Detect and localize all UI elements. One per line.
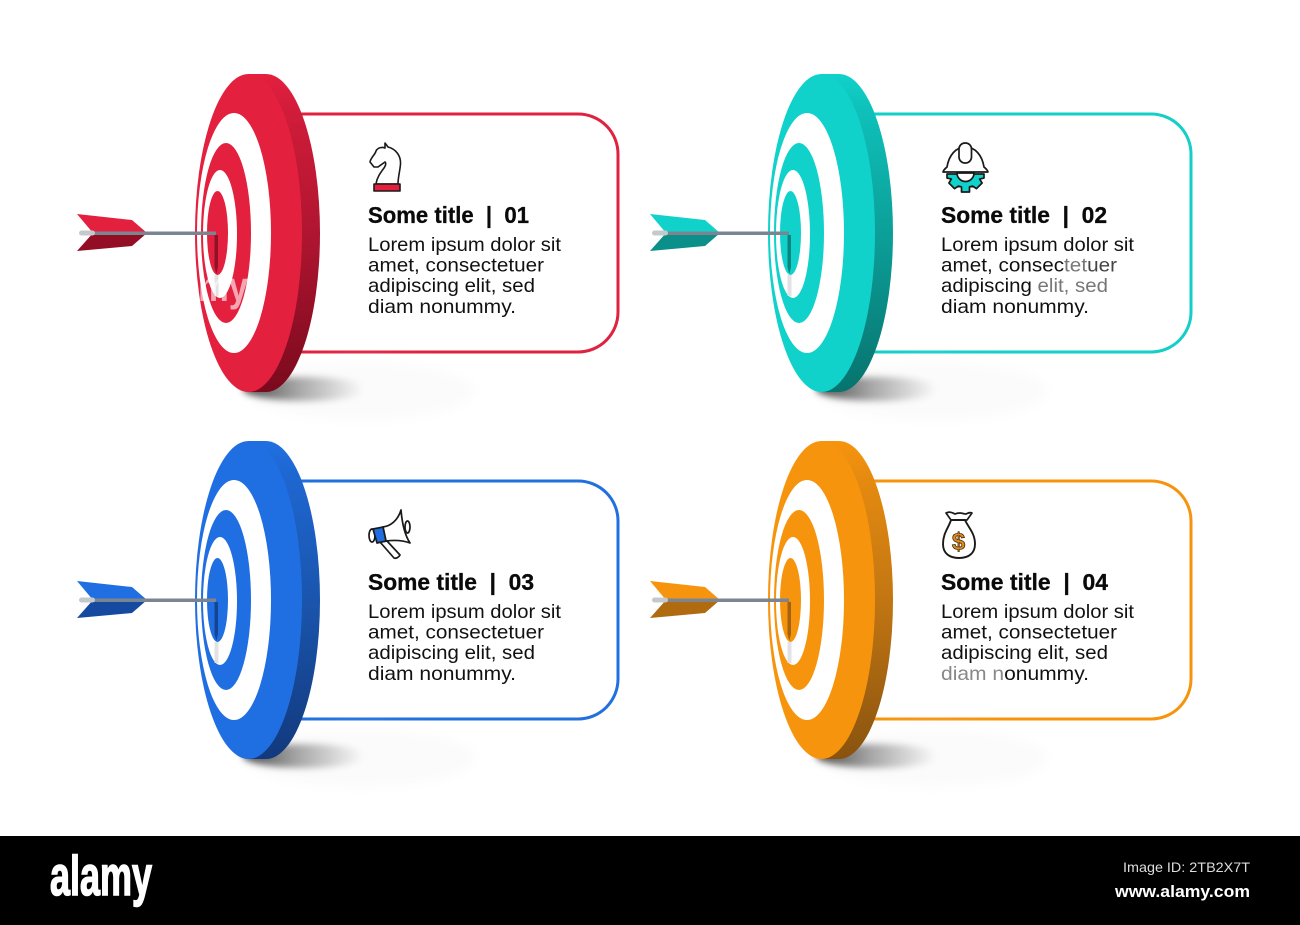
body text 03 — [368, 601, 562, 685]
panel: step 03 blue target — [77, 441, 618, 787]
body text 01 — [368, 234, 562, 318]
arrow 01 — [77, 214, 216, 251]
floor shadow 01 — [243, 362, 475, 420]
outlined card 04 — [835, 481, 1191, 719]
panel: step 02 teal target — [650, 74, 1191, 420]
website: www.alamy.com — [1114, 882, 1250, 901]
body text 03: amet, consectetuer — [368, 622, 545, 644]
arrow 02 — [650, 214, 789, 251]
body text 04: Lorem ipsum dolor sit — [941, 601, 1135, 623]
arrow 03 — [77, 581, 216, 618]
outlined card 03 — [262, 481, 618, 719]
title 02: Some title | 02 — [941, 202, 1107, 228]
panel: step 01 red target — [77, 74, 618, 420]
body text 02 — [941, 234, 1135, 318]
body text 04: diam nonummy. — [941, 663, 1089, 685]
body text 03: adipiscing elit, sed — [368, 642, 535, 664]
footer bar — [0, 836, 1300, 925]
title 03: Some title | 03 — [368, 569, 534, 595]
watermark fragment: my — [198, 263, 249, 310]
target 01 — [195, 74, 320, 392]
image id: Image ID: 2TB2X7T — [1123, 859, 1250, 875]
body text 04: amet, consectetuer — [941, 622, 1118, 644]
icon: money bag: $ — [952, 528, 966, 556]
target 04 — [768, 441, 893, 759]
title 04: Some title | 04 — [941, 569, 1108, 595]
body text 02: amet, consec tetuer — [941, 254, 1118, 276]
body text 02: diam nonummy. — [941, 296, 1089, 318]
footer logo: alamy — [50, 844, 152, 907]
body text 02: Lorem ipsum dolor sit — [941, 234, 1135, 256]
body text 01: Lorem ipsum dolor sit — [368, 234, 562, 256]
floor shadow 02 — [816, 362, 1048, 420]
body text 04 — [941, 601, 1135, 685]
icon: megaphone — [369, 510, 410, 558]
arrow 04 — [650, 581, 789, 618]
body text 02: adipiscing elit, sed — [941, 275, 1108, 297]
title 01: Some title | 01 — [368, 202, 529, 228]
floor shadow 04 — [816, 729, 1048, 787]
outlined card 02 — [835, 114, 1191, 352]
floor shadow 03 — [243, 729, 475, 787]
body text 01: adipiscing elit, sed — [368, 275, 535, 297]
body text 01: amet, consectetuer — [368, 254, 545, 276]
body text 04: adipiscing elit, sed — [941, 642, 1108, 664]
target 03 — [195, 441, 320, 759]
panel: step 04 orange target — [650, 441, 1191, 787]
icon: hard hat and gear — [943, 143, 988, 192]
body text 03: diam nonummy. — [368, 663, 516, 685]
body text 01: diam nonummy. — [368, 296, 516, 318]
body text 03: Lorem ipsum dolor sit — [368, 601, 562, 623]
target 02 — [768, 74, 893, 392]
icon: money bag — [943, 512, 975, 558]
outlined card 01 — [262, 114, 618, 352]
icon: chess knight — [370, 143, 401, 191]
